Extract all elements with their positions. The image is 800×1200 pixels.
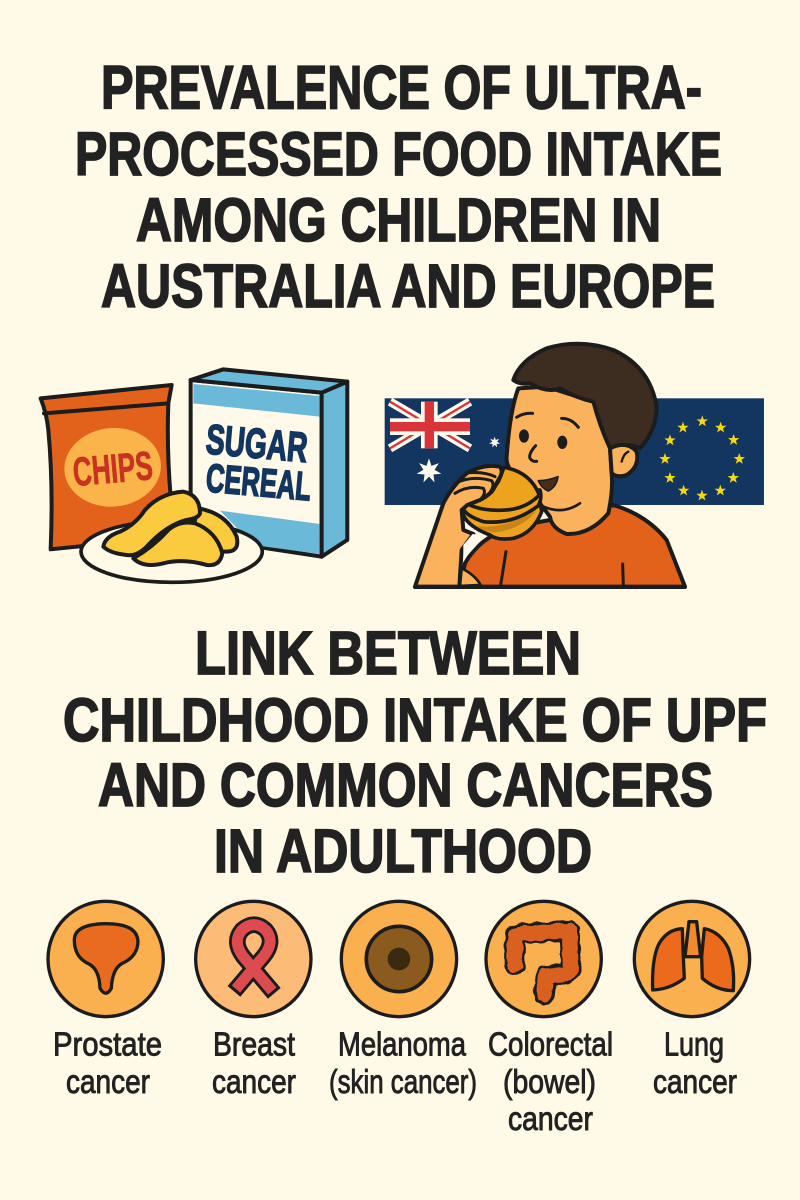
heading: link between childhood intake and cancers: IN ADULTHOOD (214, 817, 592, 885)
icon: EU stars (659, 415, 745, 501)
base line (415, 581, 685, 593)
flag banner: Australia and EU (385, 398, 764, 505)
illustration: chips and sugar cereal (41, 369, 347, 582)
icon: chips bag: CHIPS (71, 442, 155, 495)
eyes (519, 429, 567, 449)
sleeve gap (463, 534, 485, 560)
icon: breast cancer ribbon (196, 901, 311, 1017)
title: prevalence of ultra-processed food intake: AMONG CHILDREN IN (136, 186, 661, 254)
label: melanoma (329, 1026, 477, 1100)
icon: cereal box (191, 369, 347, 557)
label: colorectal cancer (488, 1026, 613, 1137)
icon: melanoma (341, 901, 457, 1017)
icon: colon (486, 901, 601, 1017)
label: melanoma: Melanoma (338, 1026, 467, 1062)
icon: union jack (390, 402, 470, 448)
icon: cereal box: SUGAR (204, 415, 310, 471)
label: colorectal cancer: cancer (508, 1100, 593, 1137)
illustration: boy eating a burger in front of flags (385, 344, 764, 587)
heading: link between childhood intake and cancers (63, 619, 767, 885)
icon: chips bag (41, 385, 177, 549)
mouth (538, 477, 558, 491)
boy (415, 344, 685, 587)
label: prostate cancer: Prostate (53, 1026, 162, 1062)
label: melanoma: (skin cancer) (329, 1063, 477, 1100)
hair (513, 344, 657, 448)
label: prostate cancer: cancer (66, 1063, 150, 1100)
icon: Commonwealth stars (417, 437, 500, 482)
label: prostate cancer (53, 1026, 162, 1100)
label: breast cancer (212, 1026, 296, 1100)
label: colorectal cancer: Colorectal (488, 1026, 613, 1062)
icon: lungs (634, 901, 750, 1017)
label: colorectal cancer: (bowel) (503, 1063, 596, 1100)
label: lung cancer: cancer (653, 1063, 737, 1100)
icon: cereal box: CEREAL (204, 456, 313, 509)
icon: prostate (48, 901, 163, 1017)
face and neck (507, 387, 612, 534)
label: breast cancer: cancer (212, 1063, 296, 1100)
ear (610, 445, 637, 476)
heading: link between childhood intake and cancers: LINK BETWEEN (195, 619, 581, 687)
label: breast cancer: Breast (213, 1026, 295, 1062)
brows and nose (517, 413, 578, 461)
label: lung cancer (653, 1026, 737, 1100)
burger (462, 467, 542, 539)
arm and hand (415, 466, 502, 587)
label: lung cancer: Lung (664, 1026, 724, 1062)
title: prevalence of ultra-processed food intake (75, 54, 722, 320)
icon: plate of chips (81, 492, 262, 582)
shirt (460, 505, 685, 587)
finger lines (455, 472, 495, 500)
